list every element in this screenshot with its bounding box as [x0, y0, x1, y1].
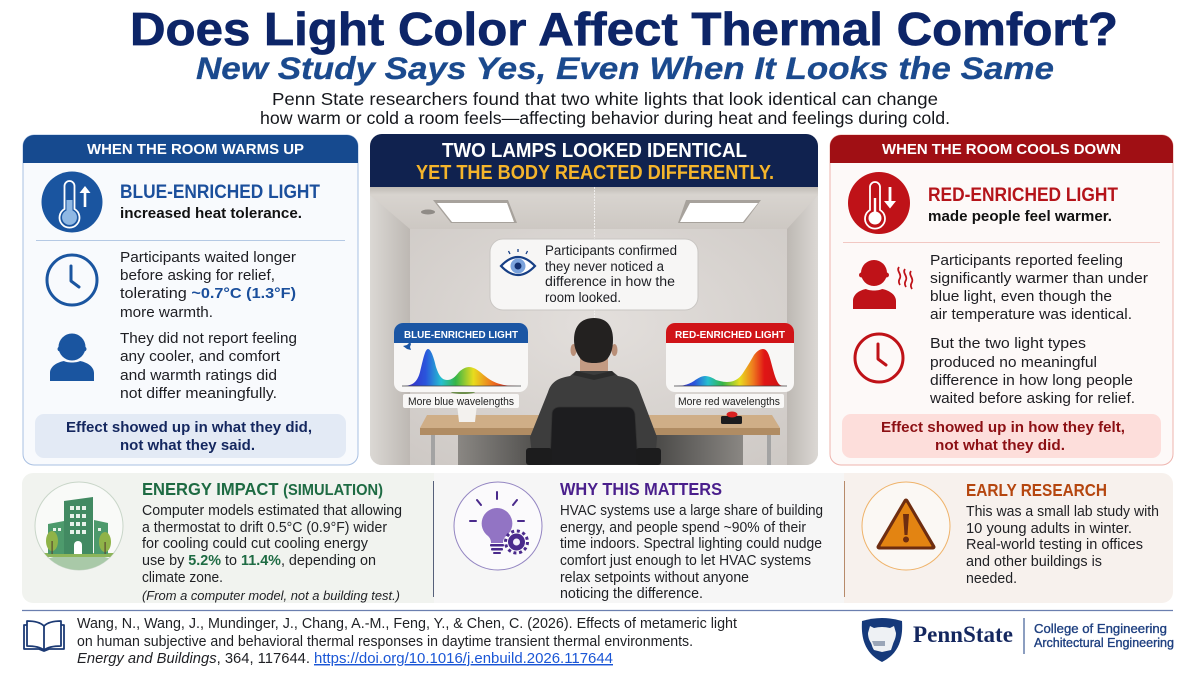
icon: shield	[862, 618, 902, 662]
chart: blue-enriched spectrum: BLUE-ENRICHED LIGHT	[404, 329, 519, 341]
icon: thermometer rising	[42, 172, 102, 232]
citation: Wang, N., Wang, J., Mundinger, J., Chang, A.-M., Feng, Y., & Chen, C. (2026). Effects of metameric light	[77, 616, 737, 632]
intro text: how warm or cold a room feels—affecting behavior during heat and feelings during cold.	[260, 108, 950, 128]
callout: never noticed: room looked.	[545, 290, 621, 305]
panel header: warms up	[23, 135, 358, 163]
text: felt warmer: blue light, even though the	[930, 288, 1112, 305]
heading: blue-enriched light: BLUE-ENRICHED LIGHT	[120, 181, 320, 203]
title: Does Light Color Affect Thermal Comfort?	[130, 3, 1118, 55]
text: no cooler: any cooler, and comfort	[120, 348, 281, 365]
callout: what they did: Effect showed up in what they did,	[66, 420, 312, 436]
chair	[550, 407, 638, 465]
chart: blue-enriched spectrum	[394, 323, 528, 408]
desk	[420, 415, 780, 465]
text: waited longer	[120, 249, 296, 321]
text: energy impact body	[142, 503, 402, 603]
text: waited longer: before asking for relief,	[120, 267, 275, 284]
panel: when the room cools down	[830, 135, 1173, 465]
heading: red-enriched light: RED-ENRICHED LIGHT	[928, 184, 1118, 206]
text: no difference: waited before asking for relief.	[929, 390, 1135, 407]
text: felt warmer: significantly warmer than under	[930, 270, 1148, 287]
text: no cooler: not differ meaningfully.	[120, 385, 277, 402]
icon: warm person	[853, 260, 912, 309]
text: early research body: needed.	[966, 571, 1017, 587]
text: no cooler: and warmth ratings did	[120, 367, 277, 384]
text: why this matters body: HVAC systems use a large share of building	[560, 503, 823, 519]
text: energy impact body: (From a computer model, not a building test.)	[142, 589, 400, 603]
panel: energy impact	[33, 479, 402, 603]
panel header: cools down	[830, 135, 1173, 163]
text: no difference	[929, 335, 1135, 407]
callout: how they felt: Effect showed up in how they felt,	[881, 420, 1125, 436]
icon: eye	[501, 249, 535, 275]
icon: lightbulb and gear	[454, 482, 542, 570]
heading: why this matters: WHY THIS MATTERS	[560, 479, 722, 499]
text: early research body	[966, 504, 1159, 587]
panel header: two lamps	[370, 134, 818, 187]
panel header: two lamps: TWO LAMPS LOOKED IDENTICAL	[442, 139, 747, 162]
chart: red-enriched spectrum: RED-ENRICHED LIGHT	[675, 329, 786, 341]
text: felt warmer: air temperature was identical.	[930, 306, 1132, 323]
citation: Energy and Buildings, 364, 117644.	[77, 651, 310, 667]
text: felt warmer	[930, 252, 1148, 323]
icon: clock	[855, 334, 903, 382]
person seated	[526, 318, 661, 465]
icon: person	[50, 334, 94, 381]
text: energy impact body: use by 5.2% to 11.4%, depending on	[142, 553, 376, 569]
logo: Penn State	[862, 618, 1174, 662]
citation: on human subjective and behavioral thermal responses in daytime transient thermal environments.	[77, 634, 693, 650]
chart: red-enriched spectrum	[666, 323, 794, 408]
callout: what they did	[35, 414, 346, 458]
text: waited longer: more warmth.	[120, 304, 213, 321]
heading: early research: EARLY RESEARCH	[966, 480, 1107, 500]
plant pot	[451, 390, 477, 422]
text: energy impact body: a thermostat to drift 0.5°C (0.9°F) wider	[142, 520, 387, 536]
citation: https://doi.org/10.1016/j.enbuild.2026.117644	[314, 651, 613, 667]
text: no cooler: They did not report feeling	[120, 330, 297, 347]
icon: ceiling lights	[421, 200, 761, 223]
text: why this matters body: time indoors. Spectral lighting could nudge	[560, 536, 822, 552]
text: why this matters body: energy, and people spend ~90% of their	[560, 520, 806, 536]
text: no cooler	[120, 330, 297, 402]
text: no difference: produced no meaningful	[930, 354, 1097, 371]
subheading: made people feel warmer.	[928, 209, 1112, 225]
icon: green buildings	[34, 482, 124, 570]
text: why this matters body: comfort just enough to let HVAC systems	[560, 553, 811, 569]
panel header: cools down: WHEN THE ROOM COOLS DOWN	[882, 141, 1121, 158]
callout: how they felt: not what they did.	[935, 438, 1065, 454]
intro text: Penn State researchers found that two white lights that look identical can change	[272, 89, 938, 109]
icon: thermometer falling	[848, 172, 910, 234]
subheading: increased heat tolerance.	[120, 206, 302, 222]
text: waited longer: tolerating ~0.7°C (1.3°F)	[120, 285, 296, 302]
callout: never noticed: difference in how the	[545, 274, 675, 289]
text: early research body: and other buildings is	[966, 554, 1102, 570]
icon: clock	[47, 255, 97, 305]
panel: when the room warms up	[23, 135, 358, 465]
citation	[77, 616, 737, 667]
panel header: two lamps: YET THE BODY REACTED DIFFERENTLY.	[416, 161, 774, 184]
chart: red-enriched spectrum: More red wavelengths	[678, 396, 780, 408]
intro text	[260, 89, 950, 128]
logo: Penn State: College of Engineering	[1034, 622, 1167, 636]
text: energy impact body: climate zone.	[142, 570, 223, 586]
text: early research body: 10 young adults in winter.	[966, 521, 1132, 537]
panel: why this matters	[454, 479, 823, 602]
logo: Penn State: PennState	[913, 622, 1013, 647]
red button	[721, 412, 742, 424]
room: side walls	[370, 195, 410, 465]
room: ceiling	[370, 187, 818, 200]
logo: Penn State: Architectural Engineering	[1034, 636, 1174, 650]
text: why this matters body: noticing the difference.	[560, 586, 703, 602]
text: why this matters body: relax setpoints without anyone	[560, 570, 749, 586]
icon: warning triangle	[862, 482, 950, 570]
chart: blue-enriched spectrum: More blue wavelengths	[408, 396, 514, 408]
callout: how they felt	[842, 414, 1161, 458]
panel: bottom band background	[22, 473, 1173, 603]
text: energy impact body: for cooling could cut cooling energy	[142, 536, 369, 552]
text: waited longer: Participants waited longer	[120, 249, 296, 266]
panel: room illustration	[370, 134, 818, 465]
icon: open book	[24, 621, 64, 651]
callout: what they did: not what they said.	[120, 438, 255, 454]
panel: early research	[862, 480, 1159, 587]
text: why this matters body	[560, 503, 823, 602]
panel header: warms up: WHEN THE ROOM WARMS UP	[87, 141, 304, 158]
subtitle: New Study Says Yes, Even When It Looks the Same	[196, 50, 1054, 86]
text: no difference: difference in how long people	[930, 372, 1133, 389]
text: early research body: This was a small lab study with	[966, 504, 1159, 520]
room: back wall	[424, 229, 774, 415]
text: no difference: But the two light types	[930, 335, 1086, 352]
callout: never noticed	[490, 239, 698, 310]
heading: energy impact: ENERGY IMPACT (SIMULATION)	[142, 479, 383, 499]
text: energy impact body: Computer models estimated that allowing	[142, 503, 402, 519]
callout: never noticed: they never noticed a	[545, 259, 664, 274]
text: felt warmer: Participants reported feeling	[930, 252, 1123, 269]
text: early research body: Real-world testing in offices	[966, 537, 1143, 553]
callout: never noticed: Participants confirmed	[545, 243, 677, 258]
